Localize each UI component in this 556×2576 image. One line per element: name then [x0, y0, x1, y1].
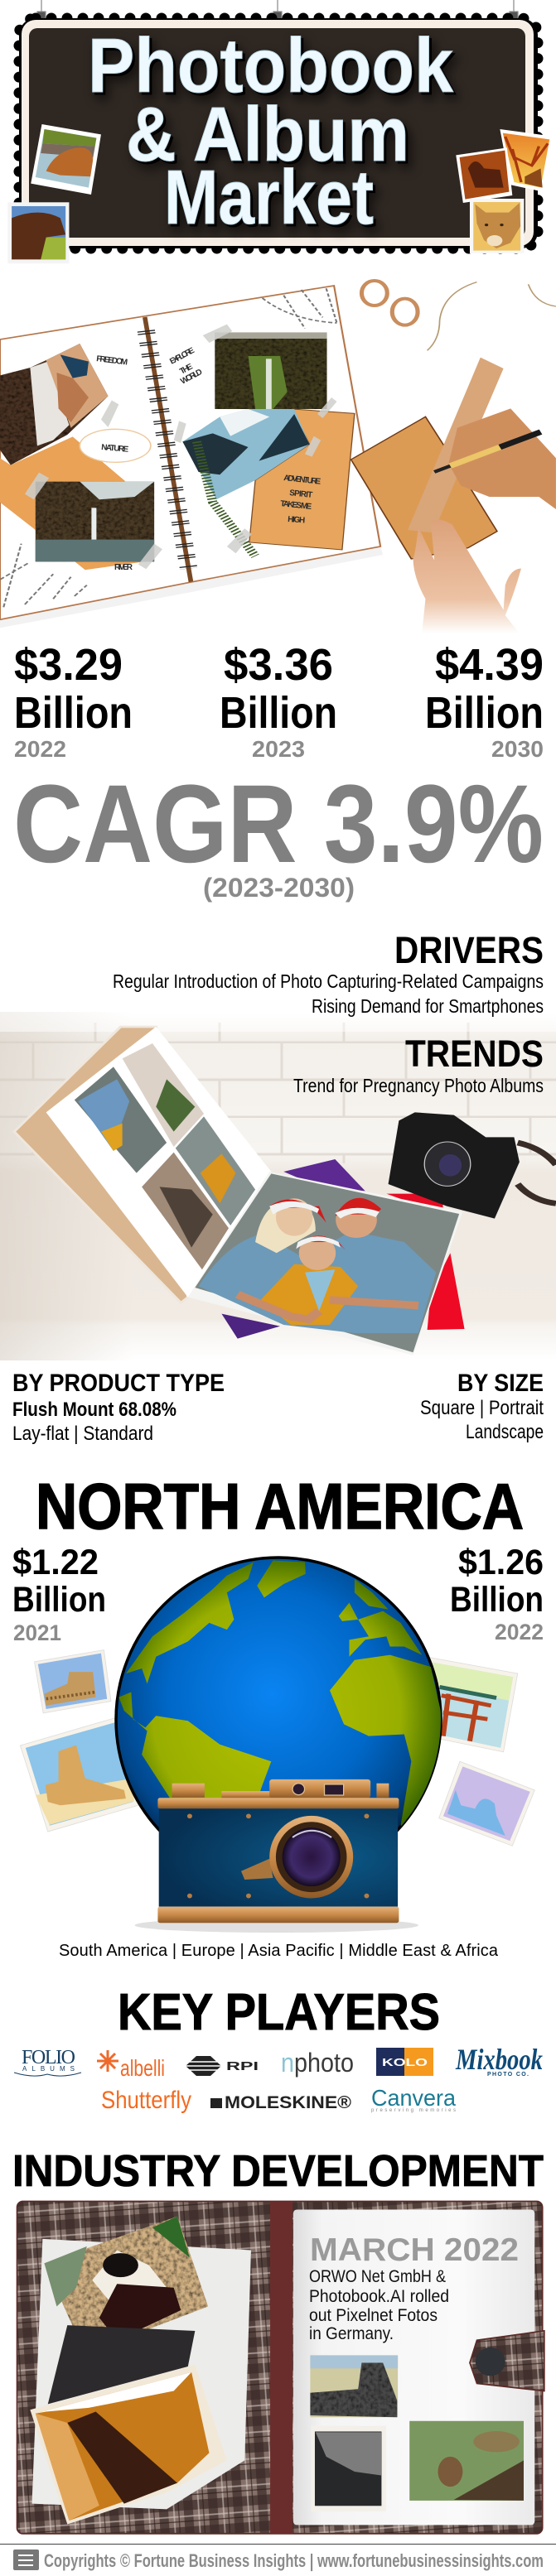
logo: KOLO [376, 2048, 433, 2076]
north america 2021 value: $1.22 [12, 1543, 99, 1582]
north america 2022 value: 2022 [495, 1620, 544, 1644]
other regions list: South America | Europe | Asia Pacific | Middle East & Africa [59, 1942, 499, 1960]
scalloped black frame [19, 18, 538, 248]
by product type block: Flush Mount 68.08% [12, 1399, 176, 1421]
leather album illustration [17, 2201, 544, 2534]
logo: Folio Albums: FOLIO [22, 2047, 75, 2068]
header board [7, 0, 555, 263]
market value 2030: $4.39 [435, 640, 544, 690]
right page [293, 2209, 534, 2525]
market value 2030: 2030 [491, 736, 544, 762]
album cover and spine [14, 1027, 188, 1302]
blank polaroid [311, 2426, 386, 2511]
leopard sunset photo [30, 2365, 227, 2525]
logo: albelli [97, 2050, 165, 2081]
snap strap [470, 2331, 544, 2391]
north america 2021 value: 2021 [13, 1620, 61, 1645]
logo: albelli: albelli [120, 2055, 165, 2081]
orange paper left [0, 436, 154, 570]
development date: MARCH 2022 [310, 2232, 519, 2268]
by product type block: Lay-flat | Standard [12, 1423, 153, 1445]
wooden ruler [408, 358, 504, 532]
family portrait figures [199, 1198, 436, 1333]
family portrait page [188, 1172, 462, 1355]
tape rings [361, 281, 418, 325]
spiral binding [146, 330, 189, 569]
notebook stamped words: TAKES ME [280, 499, 312, 512]
notebook stamped words: EXPLORE [168, 346, 196, 367]
notebook stamped words: FREEDOM [96, 354, 128, 368]
logo: KOLO: KOLO [382, 2056, 428, 2068]
maroon spine [270, 2201, 293, 2534]
notebook stamped words: NATURE [101, 443, 129, 455]
orange note paper [249, 409, 355, 550]
photo: savanna tree [500, 129, 555, 192]
market value 2022: $3.29 [14, 640, 123, 690]
second kraft paper [351, 416, 497, 559]
supporting hand [413, 519, 521, 633]
ocean sphere [116, 1558, 441, 1882]
market value 2022: 2022 [14, 736, 66, 762]
key players heading: KEY PLAYERS [118, 1984, 440, 2041]
river photo [182, 409, 310, 499]
north america 2021 value [12, 1543, 106, 1645]
continents [118, 1560, 442, 1829]
album left page [46, 1027, 271, 1298]
album photo background [0, 1012, 556, 1360]
logo: Folio Albums [14, 2047, 81, 2076]
logo: Canvera: Canvera [371, 2085, 456, 2111]
rosemary sprig [196, 441, 255, 556]
by product type block [12, 1370, 225, 1445]
forest waterfall photo [215, 333, 327, 409]
dark board panel [29, 28, 525, 238]
notebook stamped words [96, 346, 322, 572]
postcard: sphinx [20, 1716, 138, 1832]
scrapbook hero illustration [0, 281, 556, 633]
bottom gold band [157, 1907, 399, 1923]
development description: in Germany. [309, 2324, 394, 2343]
north america 2022 value [450, 1543, 544, 1644]
market value 2022 [14, 640, 133, 762]
lens [269, 1816, 353, 1898]
by size block: BY SIZE [457, 1370, 544, 1397]
camera [389, 1112, 556, 1219]
photo: lion at dusk [456, 147, 512, 203]
postcard: torii gate [425, 1657, 518, 1752]
by product type block: BY PRODUCT TYPE [12, 1370, 225, 1397]
waterfall lake photo [36, 482, 154, 561]
trends block [293, 1033, 544, 1096]
photo: lion cub [470, 199, 524, 253]
notebook stamped words: WORLD [179, 368, 204, 387]
film lever [241, 1859, 273, 1880]
notebook stamped words: SPIRIT [289, 489, 313, 500]
development description [309, 2267, 449, 2343]
logo: Folio Albums: ALBUMS [22, 2065, 75, 2073]
market value 2023: $3.36 [224, 640, 333, 690]
photo: hippo [31, 124, 101, 195]
market value 2023: 2023 [252, 736, 305, 762]
left curled sheet [32, 2239, 251, 2509]
market value 2030 [425, 640, 544, 762]
title text [88, 22, 453, 240]
writing hand [448, 408, 556, 509]
north america 2022 value: $1.26 [458, 1543, 544, 1582]
left page photos [75, 1043, 255, 1269]
development description: Photobook.AI rolled [309, 2287, 449, 2306]
globe [114, 1556, 442, 1832]
open notebook [0, 286, 383, 628]
notebook stamped words: THE [178, 362, 195, 377]
botanical sketch top [263, 288, 337, 329]
photo album illustration [14, 1027, 556, 1355]
books under album [221, 1159, 465, 1339]
cheetah photo [44, 2217, 208, 2353]
drivers block [113, 929, 544, 1017]
plaid cover [17, 2201, 543, 2534]
travel postcards [20, 1650, 534, 1846]
body rivets [187, 1813, 369, 1898]
north america 2021 value: Billion [12, 1580, 106, 1620]
logo: Shutterfly: Shutterfly [101, 2087, 191, 2114]
title text: & Album [126, 91, 409, 177]
vintage camera [135, 1779, 418, 1933]
postcard: colosseum [35, 1650, 111, 1713]
logo: RPI: RPI [226, 2059, 259, 2073]
market value 2022: Billion [14, 688, 133, 738]
logo: Canvera: preserving memories [371, 2108, 456, 2113]
title text: Photobook [88, 22, 453, 108]
nature sticker [80, 429, 151, 462]
navy body [159, 1808, 398, 1907]
logo: nphoto: nphoto [281, 2048, 354, 2078]
north america 2022 value: Billion [450, 1580, 544, 1620]
zebra photo [310, 2355, 398, 2417]
washi tape pieces [25, 325, 337, 569]
market value 2023 [220, 640, 337, 762]
footer [0, 2544, 556, 2571]
cream border [22, 20, 534, 246]
botanical sketch bottom [0, 544, 87, 607]
notebook stamped words: HIGH [288, 515, 306, 525]
hanging clips [37, 0, 518, 19]
postcard: taj mahal [439, 1761, 534, 1846]
logo: RPI [186, 2056, 259, 2076]
by size block [420, 1370, 544, 1443]
waterfall climber photo [0, 344, 109, 465]
drivers block: DRIVERS [394, 929, 544, 971]
footer logo [13, 2550, 39, 2570]
development description: out Pixelnet Fotos [309, 2306, 438, 2325]
logo: Moleskine: MOLESKINE® [225, 2093, 352, 2112]
title text: Market [164, 154, 374, 240]
pen [434, 432, 541, 472]
notebook stamped words: RIVER [114, 563, 133, 572]
CAGR period: (2023-2030) [203, 873, 355, 903]
black instant photo [48, 2325, 195, 2404]
twine [428, 282, 556, 350]
trends block: TRENDS [405, 1033, 544, 1075]
camera shadow [135, 1918, 418, 1933]
development description: ORWO Net GmbH & [309, 2267, 446, 2286]
viewfinder windows [293, 1784, 344, 1795]
logo: Mixbook: PHOTO CO. [487, 2072, 529, 2078]
market value 2023: Billion [220, 688, 337, 738]
birds photo [409, 2421, 524, 2501]
top controls [172, 1779, 389, 1798]
notebook stamped words: ADVENTURE [283, 474, 322, 487]
top gold band [157, 1798, 399, 1808]
photo: elephant [7, 202, 69, 263]
